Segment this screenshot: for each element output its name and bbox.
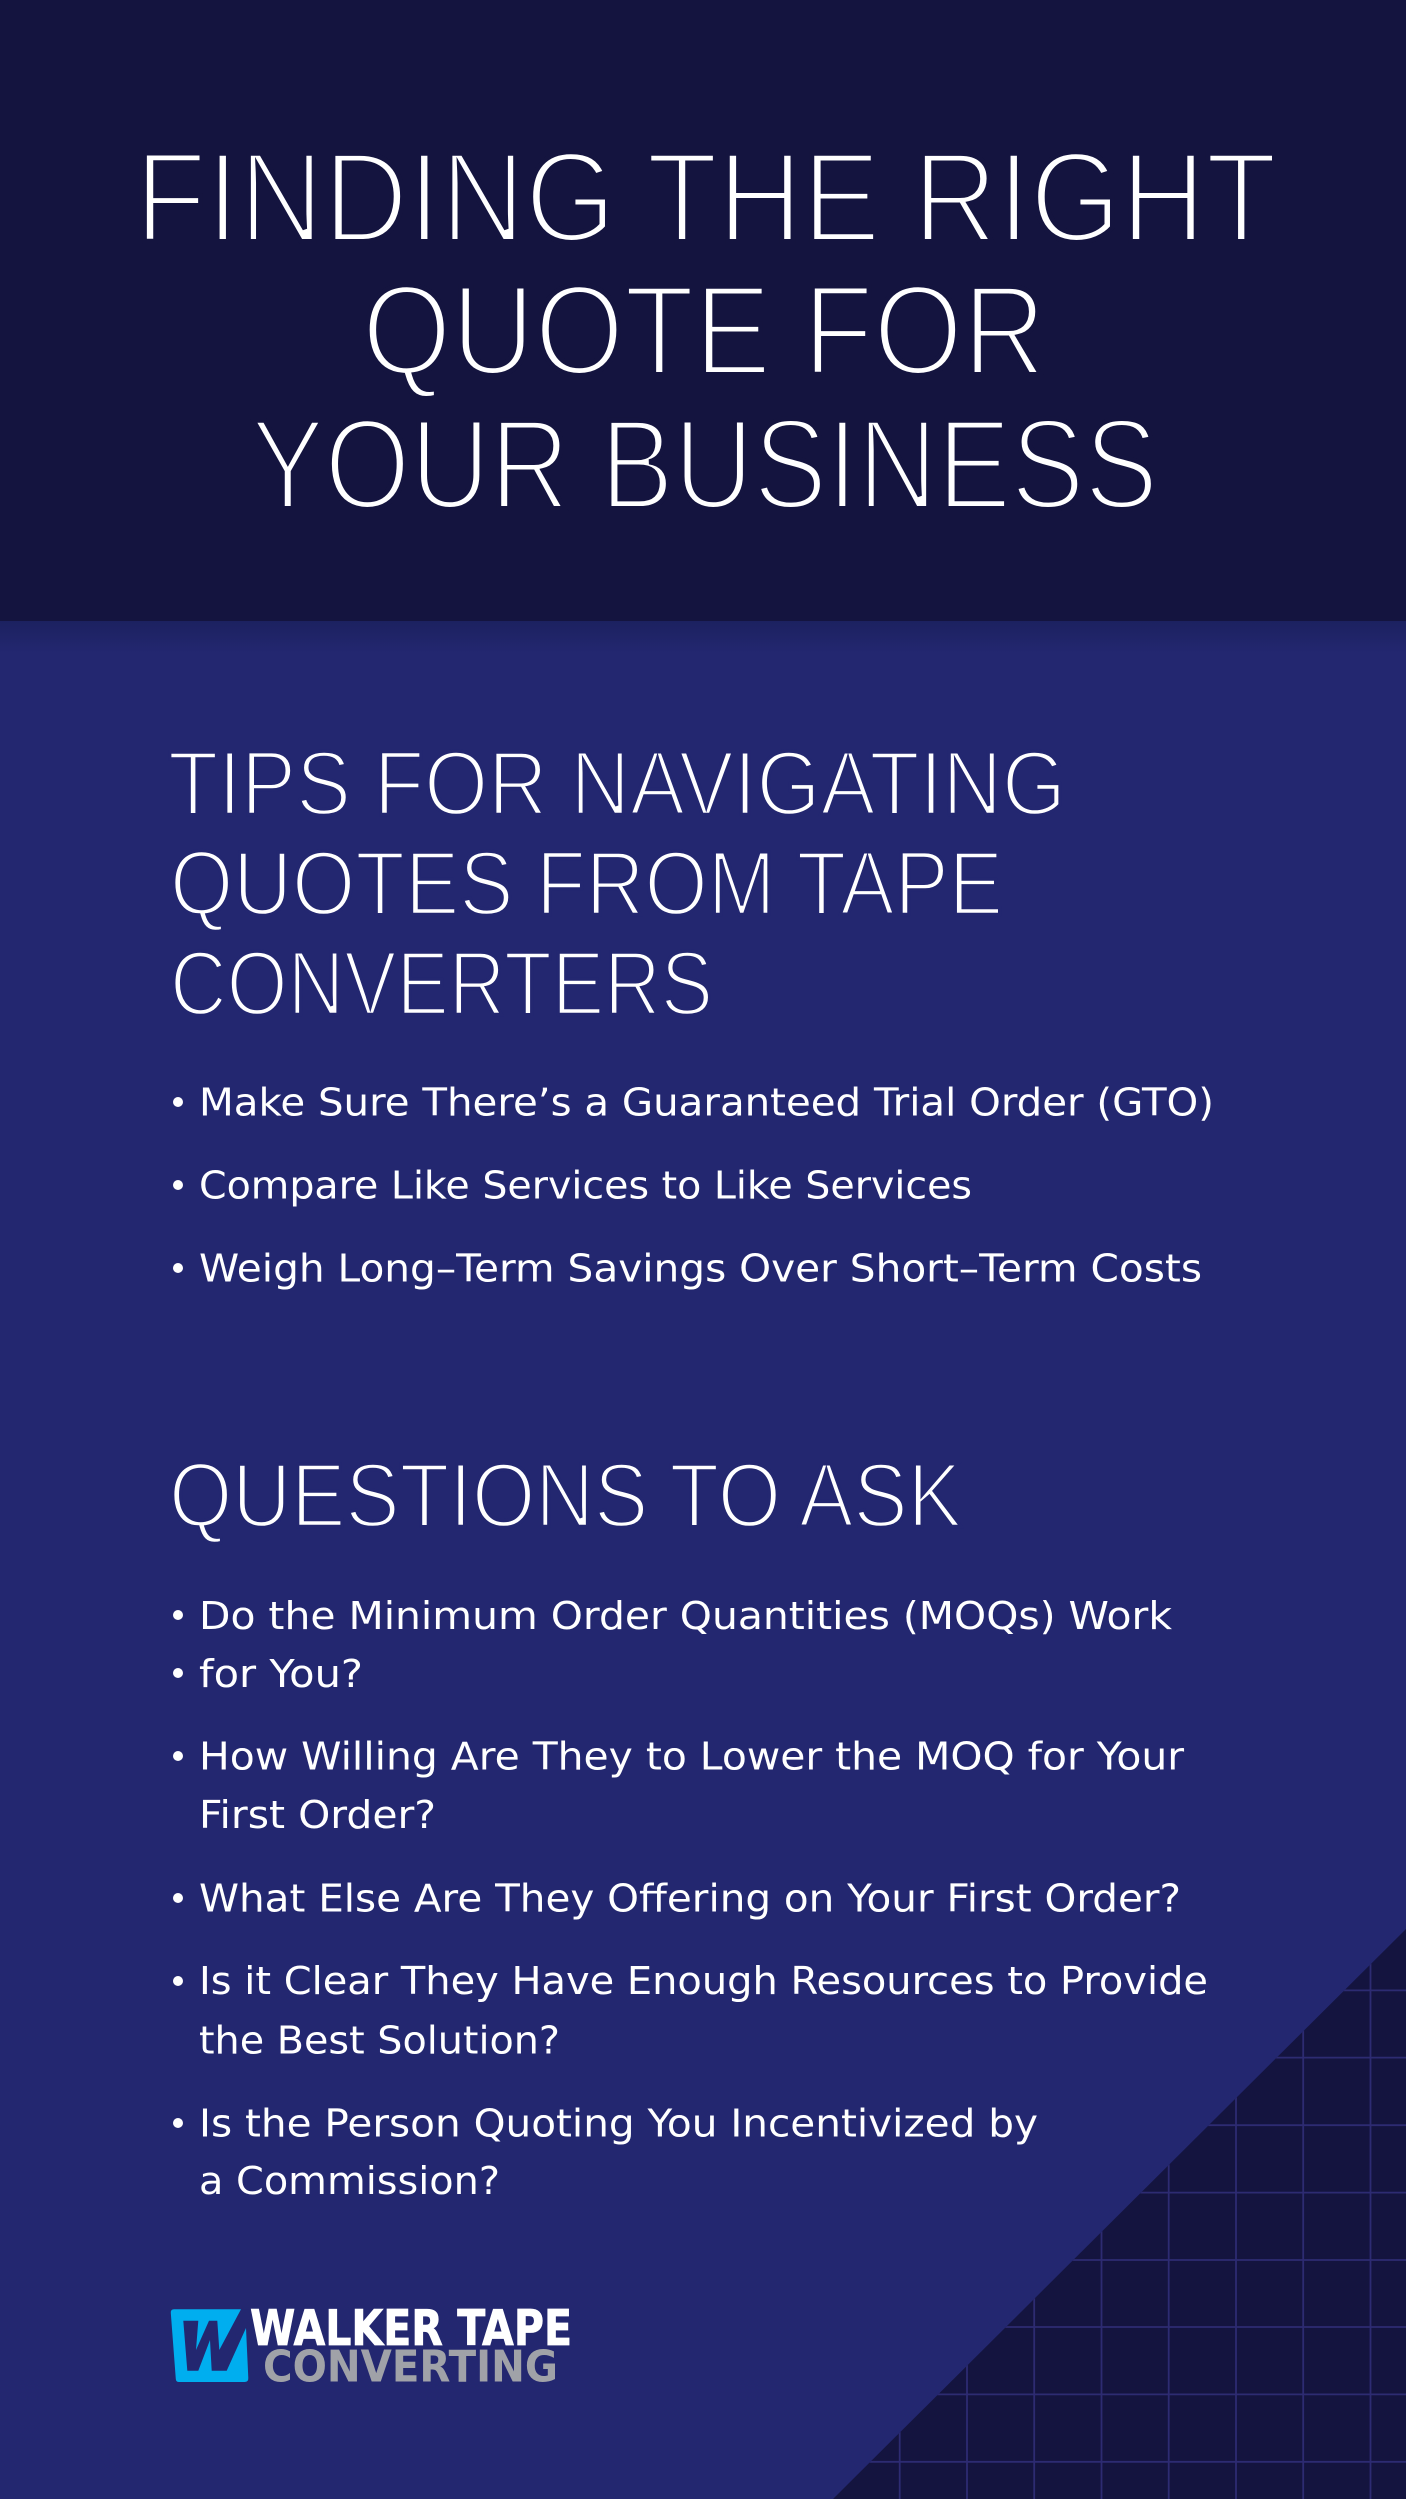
questions list — [173, 1594, 1208, 2204]
heading: tips: TIPS FOR NAVIGATING — [168, 733, 1066, 834]
questions list: Do the Minimum Order Quantities (MOQs) Work — [199, 1594, 1173, 1639]
logo wordmark: CONVERTING — [263, 2342, 558, 2393]
title: QUOTE FOR — [362, 260, 1046, 402]
logo wordmark: WALKER TAPE — [250, 2300, 572, 2357]
title: YOUR BUSINESS — [251, 394, 1158, 536]
icon: W badge — [171, 2309, 252, 2382]
questions list: Is the Person Quoting You Incentivized by — [199, 2101, 1038, 2146]
heading: questions: QUESTIONS TO ASK — [169, 1446, 962, 1547]
questions list: the Best Solution? — [199, 2018, 560, 2063]
tips list: Make Sure There’s a Guaranteed Trial Order (GTO) — [199, 1081, 1214, 1126]
header panel — [0, 0, 1406, 621]
main background panel — [0, 621, 1406, 2499]
logo wordmark — [250, 2300, 572, 2393]
title — [135, 126, 1277, 536]
questions list: First Order? — [199, 1793, 436, 1838]
tips list: Compare Like Services to Like Services — [199, 1163, 972, 1208]
tips list: Weigh Long–Term Savings Over Short–Term Costs — [199, 1247, 1202, 1292]
heading: tips — [168, 733, 1066, 1034]
questions list: How Willing Are They to Lower the MOQ for Your — [199, 1735, 1184, 1780]
heading: tips: CONVERTERS — [170, 933, 713, 1034]
header shadow gradient — [0, 621, 1406, 653]
corner grid decoration — [833, 1929, 1406, 2499]
questions list: Is it Clear They Have Enough Resources to Provide — [199, 1959, 1208, 2004]
heading: tips: QUOTES FROM TAPE — [170, 833, 1003, 934]
questions list: What Else Are They Offering on Your First Order? — [199, 1876, 1181, 1921]
questions list: for You? — [199, 1652, 363, 1697]
tips list — [173, 1081, 1214, 1292]
logo: Walker Tape Converting — [171, 2300, 572, 2393]
title: FINDING THE RIGHT — [135, 126, 1277, 270]
questions list: a Commission? — [199, 2159, 500, 2204]
